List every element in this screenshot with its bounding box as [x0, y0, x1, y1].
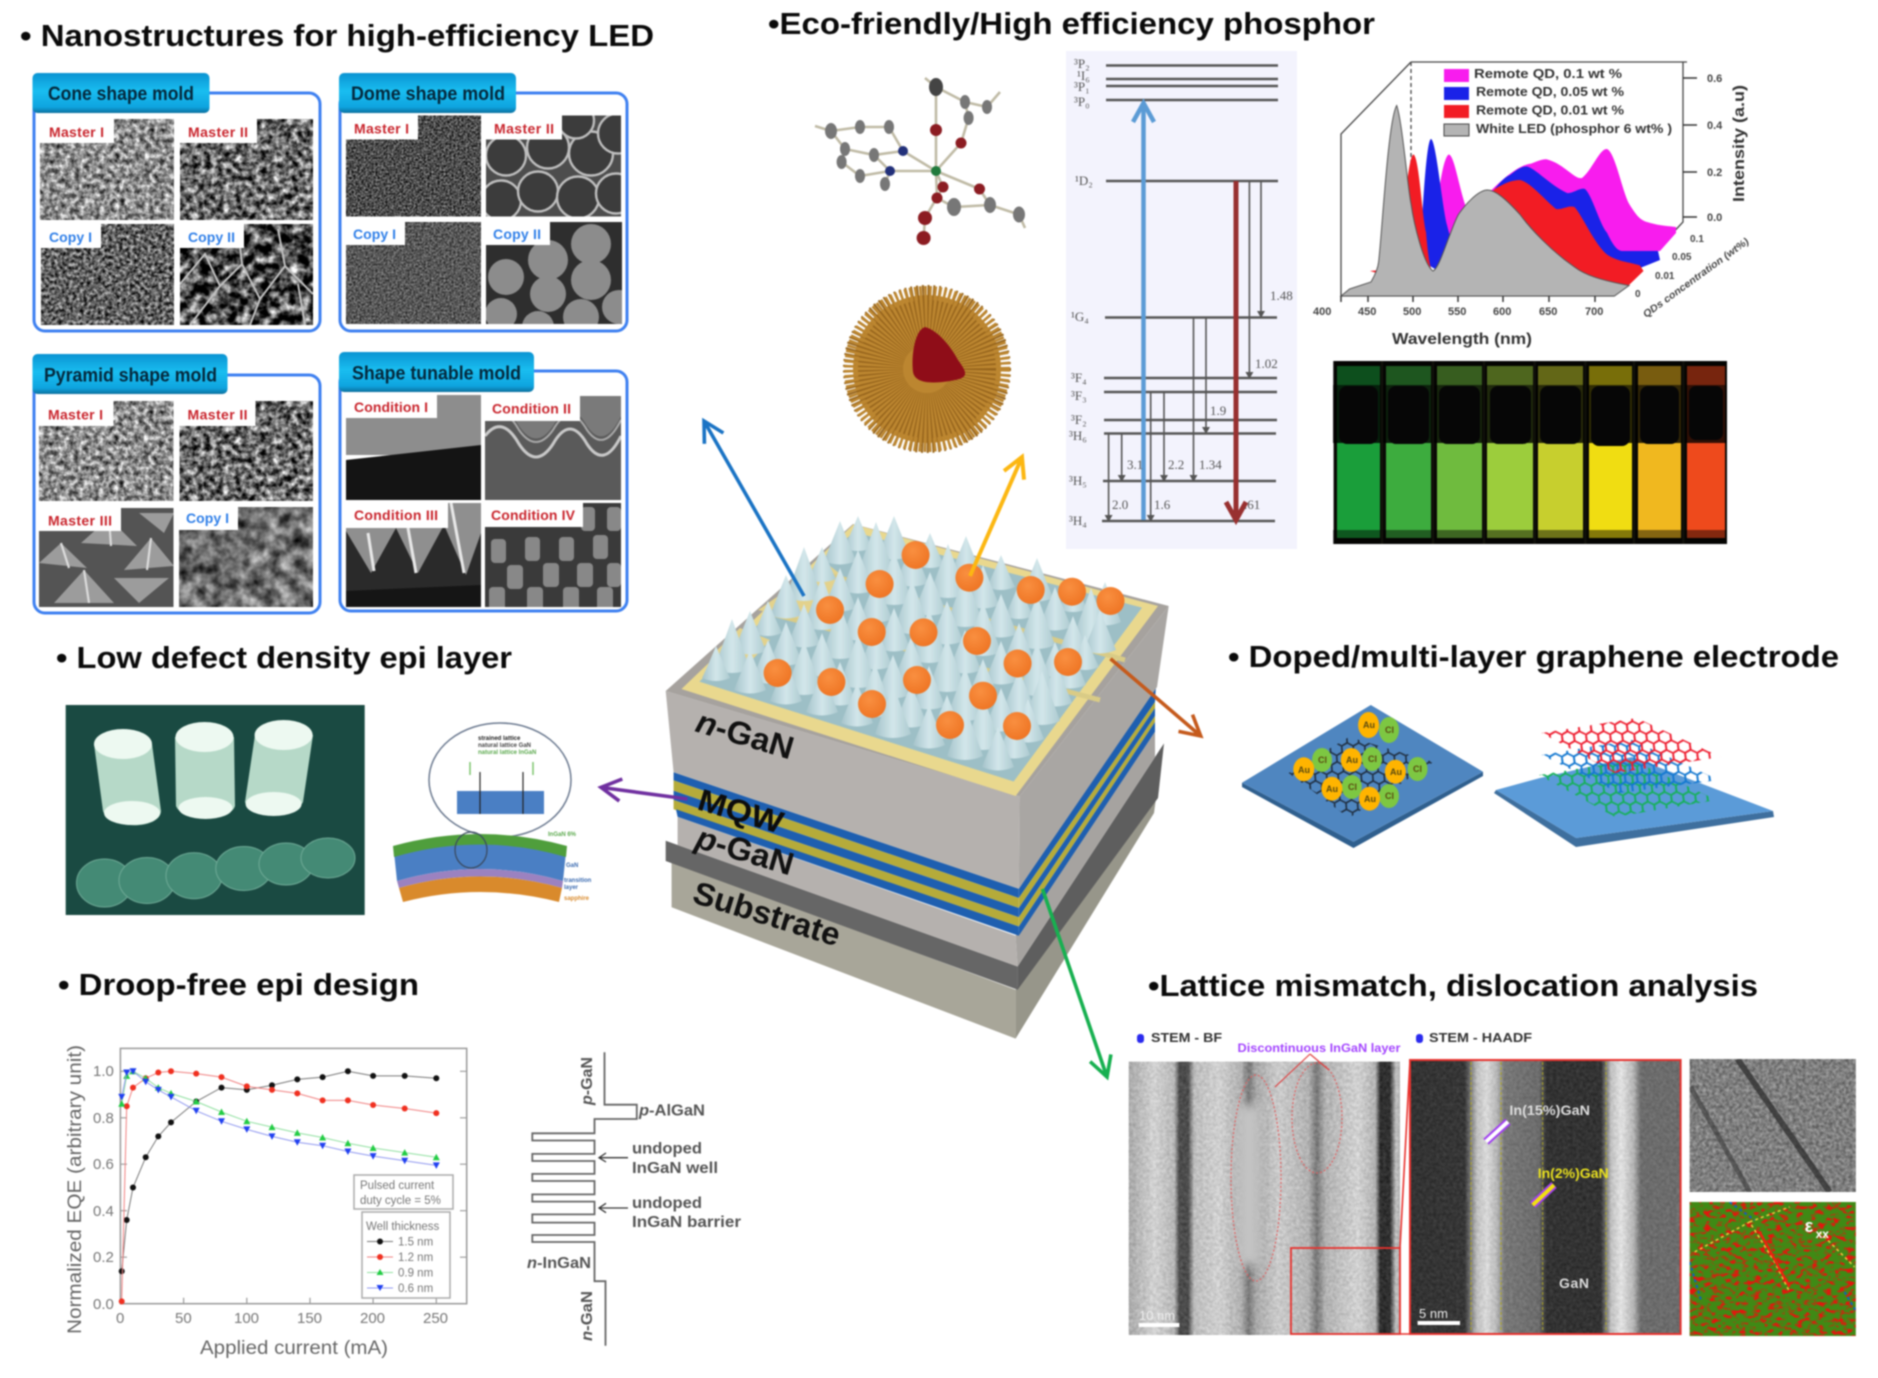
chart: normalized EQE vs applied current: 0.6: [93, 1156, 114, 1173]
chart: QD emission spectra: 0.05: [1672, 252, 1692, 263]
legend: spectra: White LED (phosphor 6 wt% ): [1476, 122, 1672, 136]
chart: energy level diagram: .61: [1244, 497, 1260, 512]
panel: cone shape mold: [32, 73, 320, 331]
legend: well thickness: 1.2 nm: [398, 1252, 433, 1264]
panel: lattice mismatch and dislocation analysis: [1129, 968, 1857, 1336]
image: dislocation TEM: [1688, 1058, 1857, 1193]
chart: energy level diagram: 2.0: [1112, 497, 1128, 512]
legend: well thickness: [362, 1212, 450, 1298]
image: STEM-BF micrograph: [1129, 1030, 1401, 1335]
chart: energy level diagram: 1.02: [1255, 356, 1278, 371]
chart: normalized EQE vs applied current: Normalized EQE (arbitrary unit): [65, 1045, 86, 1334]
chart: energy level diagram: 3.1: [1127, 457, 1143, 472]
panel: shape tunable mold: Condition III: [354, 507, 438, 523]
panel: dome shape mold: [339, 73, 638, 343]
diagram: strained lattice layers: natural lattice InGaN: [478, 750, 536, 756]
chart: energy level diagram: 1.6: [1154, 497, 1171, 512]
arrow: brown to graphene electrode: [1110, 659, 1201, 736]
chart: energy level diagram: 1.48: [1270, 288, 1293, 303]
icon: molecule structure: [815, 78, 1025, 245]
panel: shape tunable mold: [339, 352, 627, 611]
diagram: band structure: n-InGaN: [527, 1255, 591, 1272]
diagram: band structure: InGaN barrier: [632, 1214, 741, 1231]
panel: shape tunable mold: Condition IV: [491, 507, 576, 523]
layer: n-GaN: [666, 524, 1169, 889]
panel: doped multi-layer graphene electrode: [1228, 639, 1839, 848]
icon: doped graphene plate: Cl: [1368, 754, 1377, 764]
heading: low defect: • Low defect density epi layer: [56, 640, 512, 675]
panel: shape tunable mold: Shape tunable mold: [352, 364, 521, 384]
chart: energy level diagram: ³H₆: [1069, 428, 1087, 443]
legend: well thickness: 0.6 nm: [398, 1283, 433, 1295]
illustration: LED device stack: [666, 516, 1169, 1039]
chart: energy level diagram: ³P₁: [1074, 79, 1090, 94]
chart: QD emission spectra: 0.6: [1707, 73, 1722, 85]
chart: energy level diagram: 1.34: [1199, 457, 1222, 472]
chart: QD emission spectra: 0.4: [1707, 120, 1723, 132]
arrow: In(2%)GaN pointer: [1533, 1185, 1554, 1205]
chart: QD emission spectra: 600: [1493, 306, 1511, 318]
surface: light-extraction cones: [702, 516, 1121, 770]
chart: normalized EQE vs applied current: 0.8: [93, 1110, 114, 1127]
chart: QD emission spectra: 0.01: [1655, 271, 1675, 282]
label: Substrate: Substrate: [689, 874, 845, 953]
image: strain map exx: ε: [1805, 1216, 1814, 1236]
panel: cone shape mold: Copy II: [188, 229, 235, 245]
panel: pyramid shape mold: Master I: [48, 406, 103, 422]
arrow: In(15%)GaN pointer: [1486, 1122, 1508, 1142]
chart: QD emission spectra: 700: [1585, 306, 1603, 318]
image: STEM-BF micrograph: Discontinuous InGaN layer: [1238, 1041, 1401, 1055]
chart: QD emission spectra: 450: [1358, 306, 1376, 318]
chart: energy level diagram: ¹G₄: [1071, 309, 1089, 324]
image: strain map exx: xx: [1816, 1227, 1829, 1241]
surface: orange nanoparticles: [764, 541, 1124, 740]
diagram: strained lattice layers: strained lattice: [478, 736, 521, 742]
image: STEM-BF micrograph: STEM - BF: [1151, 1030, 1222, 1045]
heading: nanostructures: • Nanostructures for high-efficiency LED: [20, 18, 654, 53]
chart: energy level diagram: ¹I₆: [1077, 68, 1090, 83]
diagram: band structure: undoped: [632, 1195, 702, 1212]
chart: energy level diagram: ³F₃: [1071, 388, 1087, 403]
panel: eco-friendly phosphor: [768, 6, 1752, 549]
label: MQW: MQW: [694, 782, 788, 841]
diagram: band structure: InGaN well: [632, 1160, 718, 1177]
chart: energy level diagram: ³F₄: [1071, 370, 1087, 385]
icon: doped graphene plate: Cl: [1385, 725, 1394, 735]
icon: doped graphene plate: [1242, 705, 1483, 848]
icon: doped graphene plate: Cl: [1385, 791, 1394, 801]
chart: normalized EQE vs applied current: 100: [234, 1310, 259, 1327]
arrow: purple to epi layer: [601, 779, 687, 801]
icon: doped graphene plate: Au: [1326, 784, 1338, 794]
chart: energy level diagram: ³P₀: [1074, 94, 1090, 109]
image: STEM-HAADF micrograph: In(2%)GaN: [1538, 1165, 1609, 1181]
chart: normalized EQE vs applied current: 0.0: [93, 1296, 114, 1313]
chart: normalized EQE vs applied current: 1.0: [93, 1063, 114, 1080]
image: STEM-HAADF micrograph: STEM - HAADF: [1429, 1030, 1532, 1045]
label: p-GaN: p-GaN: [691, 819, 798, 882]
chart: energy level diagram: ³H₄: [1069, 513, 1087, 528]
photo: fluorescent QD vials: [1333, 361, 1727, 544]
legend: well thickness: Well thickness: [366, 1221, 440, 1233]
chart: QD emission spectra: 0.1: [1690, 234, 1704, 245]
chart: normalized EQE vs applied current: 150: [297, 1310, 322, 1327]
icon: doped graphene plate: Au: [1346, 755, 1358, 765]
chart: energy level diagram: 2.2: [1168, 457, 1184, 472]
diagram: strained lattice layers: layer: [564, 885, 579, 891]
chart: normalized EQE vs applied current: 0.4: [93, 1203, 114, 1220]
chart: QD emission spectra: Wavelength (nm): [1392, 331, 1532, 348]
panel: cone shape mold: Master I: [49, 124, 104, 140]
diagram: band structure: n-GaN: [579, 1291, 596, 1341]
arrow: green to lattice analysis: [1042, 889, 1111, 1077]
arrow: yellow to phosphor: [970, 457, 1024, 576]
panel: pyramid shape mold: Master II: [188, 406, 248, 422]
icon: doped graphene plate: Au: [1298, 765, 1310, 775]
chart: normalized EQE vs applied current: 250: [423, 1310, 448, 1327]
panel: pyramid shape mold: [32, 354, 320, 613]
diagram: strained lattice layers: [393, 723, 592, 902]
diagram: strained lattice layers: transition: [564, 878, 592, 884]
diagram: strained lattice layers: sapphire: [564, 896, 590, 902]
icon: doped graphene plate: Au: [1363, 720, 1375, 730]
chart: energy level diagram: ³P₂: [1074, 56, 1090, 71]
chart: energy level diagram: 1.9: [1210, 403, 1226, 418]
chart: QD emission spectra: QDs concentration (wt%): [1641, 236, 1752, 320]
arrow: blue to nanostructures: [704, 421, 804, 596]
heading: lattice mismatch: •Lattice mismatch, dislocation analysis: [1148, 968, 1758, 1003]
layer: MQW bands: [674, 685, 1156, 936]
legend: spectra: [1444, 67, 1672, 136]
layer: substrate: [672, 798, 1156, 1039]
panel: dome shape mold: Master I: [354, 120, 409, 136]
panel: dome shape mold: Master II: [494, 120, 554, 136]
image: STEM-HAADF micrograph: GaN: [1559, 1275, 1589, 1291]
heading: droop-free: • Droop-free epi design: [58, 967, 419, 1002]
image: STEM-HAADF micrograph: 5 nm: [1419, 1306, 1448, 1321]
chart: normalized EQE vs applied current: 200: [360, 1310, 385, 1327]
chart: normalized EQE vs applied current: 0: [116, 1310, 124, 1327]
chart: QD emission spectra: 0: [1635, 289, 1641, 300]
chart: QD emission spectra: Intensity (a.u): [1731, 85, 1748, 202]
chart: energy level diagram: [1066, 51, 1297, 549]
panel: low defect density epi layer: [56, 640, 592, 915]
chart: energy level diagram: ¹D₂: [1075, 173, 1093, 188]
legend: pulse conditions: Pulsed current: [360, 1180, 435, 1192]
panel: pyramid shape mold: Master III: [48, 512, 112, 528]
legend: well thickness: 0.9 nm: [398, 1268, 433, 1280]
chart: QD emission spectra: 0.2: [1707, 167, 1722, 179]
legend: spectra: Remote QD, 0.1 wt %: [1474, 67, 1622, 81]
icon: doped graphene plate: Au: [1364, 794, 1376, 804]
chart: normalized EQE vs applied current: [65, 1045, 467, 1359]
icon: doped graphene plate: Cl: [1413, 764, 1422, 774]
image: STEM-BF micrograph: 10 nm: [1139, 1308, 1175, 1323]
diagram: band structure: p-AlGaN: [638, 1103, 705, 1120]
panel: shape tunable mold: Condition II: [492, 400, 571, 416]
panel: dome shape mold: Copy II: [493, 226, 541, 242]
chart: energy level diagram: ³H₅: [1069, 473, 1087, 488]
chart: normalized EQE vs applied current: 50: [175, 1310, 192, 1327]
panel: dome shape mold: Dome shape mold: [351, 84, 505, 105]
diagram: band structure: undoped: [632, 1140, 702, 1157]
panel: cone shape mold: Cone shape mold: [48, 84, 194, 105]
panel: pyramid shape mold: Pyramid shape mold: [44, 366, 217, 386]
chart: QD emission spectra: 500: [1403, 306, 1421, 318]
diagram: band structure: [527, 1052, 741, 1346]
panel: dome shape mold: Copy I: [353, 226, 396, 242]
legend: pulse conditions: [354, 1175, 453, 1209]
heading: phosphor: •Eco-friendly/High efficiency phosphor: [768, 6, 1375, 41]
photo: sapphire ingots and wafers: [66, 705, 365, 915]
legend: spectra: Remote QD, 0.05 wt %: [1476, 85, 1624, 99]
image: strain map exx: [1688, 1200, 1857, 1338]
chart: QD emission spectra: 0.0: [1707, 212, 1722, 224]
panel: nanostructures for high-efficiency LED: [20, 18, 654, 613]
surface: yellow frame and grooves: [682, 524, 1158, 796]
panel: cone shape mold: Copy I: [49, 229, 92, 245]
diagram: strained lattice layers: GaN: [566, 863, 578, 869]
panel: pyramid shape mold: Copy I: [186, 510, 229, 526]
icon: multi-layer graphene plate: [1494, 718, 1774, 847]
image: STEM-HAADF micrograph: In(15%)GaN: [1509, 1102, 1590, 1118]
panel: shape tunable mold: Condition I: [354, 399, 428, 415]
icon: doped graphene plate: Cl: [1318, 755, 1327, 765]
panel: cone shape mold: Master II: [188, 124, 248, 140]
layer: dark buffer: [666, 743, 1164, 990]
diagram: strained lattice layers: natural lattice GaN: [478, 743, 531, 749]
chart: QD emission spectra: 650: [1539, 306, 1557, 318]
legend: spectra: Remote QD, 0.01 wt %: [1476, 104, 1624, 118]
chart: energy level diagram: ³F₂: [1071, 412, 1087, 427]
heading: graphene electrode: • Doped/multi-layer graphene electrode: [1228, 639, 1839, 674]
diagram: strained lattice layers: InGaN 6%: [548, 832, 577, 838]
chart: QD emission spectra: [1313, 62, 1752, 348]
chart: normalized EQE vs applied current: 0.2: [93, 1249, 114, 1266]
legend: pulse conditions: duty cycle = 5%: [360, 1195, 441, 1207]
icon: nanoparticle: [851, 293, 1003, 445]
chart: QD emission spectra: 550: [1448, 306, 1466, 318]
label: n-GaN: n-GaN: [692, 703, 798, 766]
panel: droop-free epi design: [58, 967, 741, 1359]
chart: normalized EQE vs applied current: Applied current (mA): [200, 1338, 388, 1359]
icon: doped graphene plate: Au: [1390, 767, 1402, 777]
icon: doped graphene plate: Cl: [1348, 782, 1357, 792]
legend: well thickness: 1.5 nm: [398, 1236, 433, 1248]
image: STEM-HAADF micrograph: [1400, 1030, 1681, 1334]
chart: QD emission spectra: 400: [1313, 306, 1331, 318]
diagram: band structure: p-GaN: [579, 1057, 596, 1106]
layer: p-GaN: [678, 732, 1155, 966]
